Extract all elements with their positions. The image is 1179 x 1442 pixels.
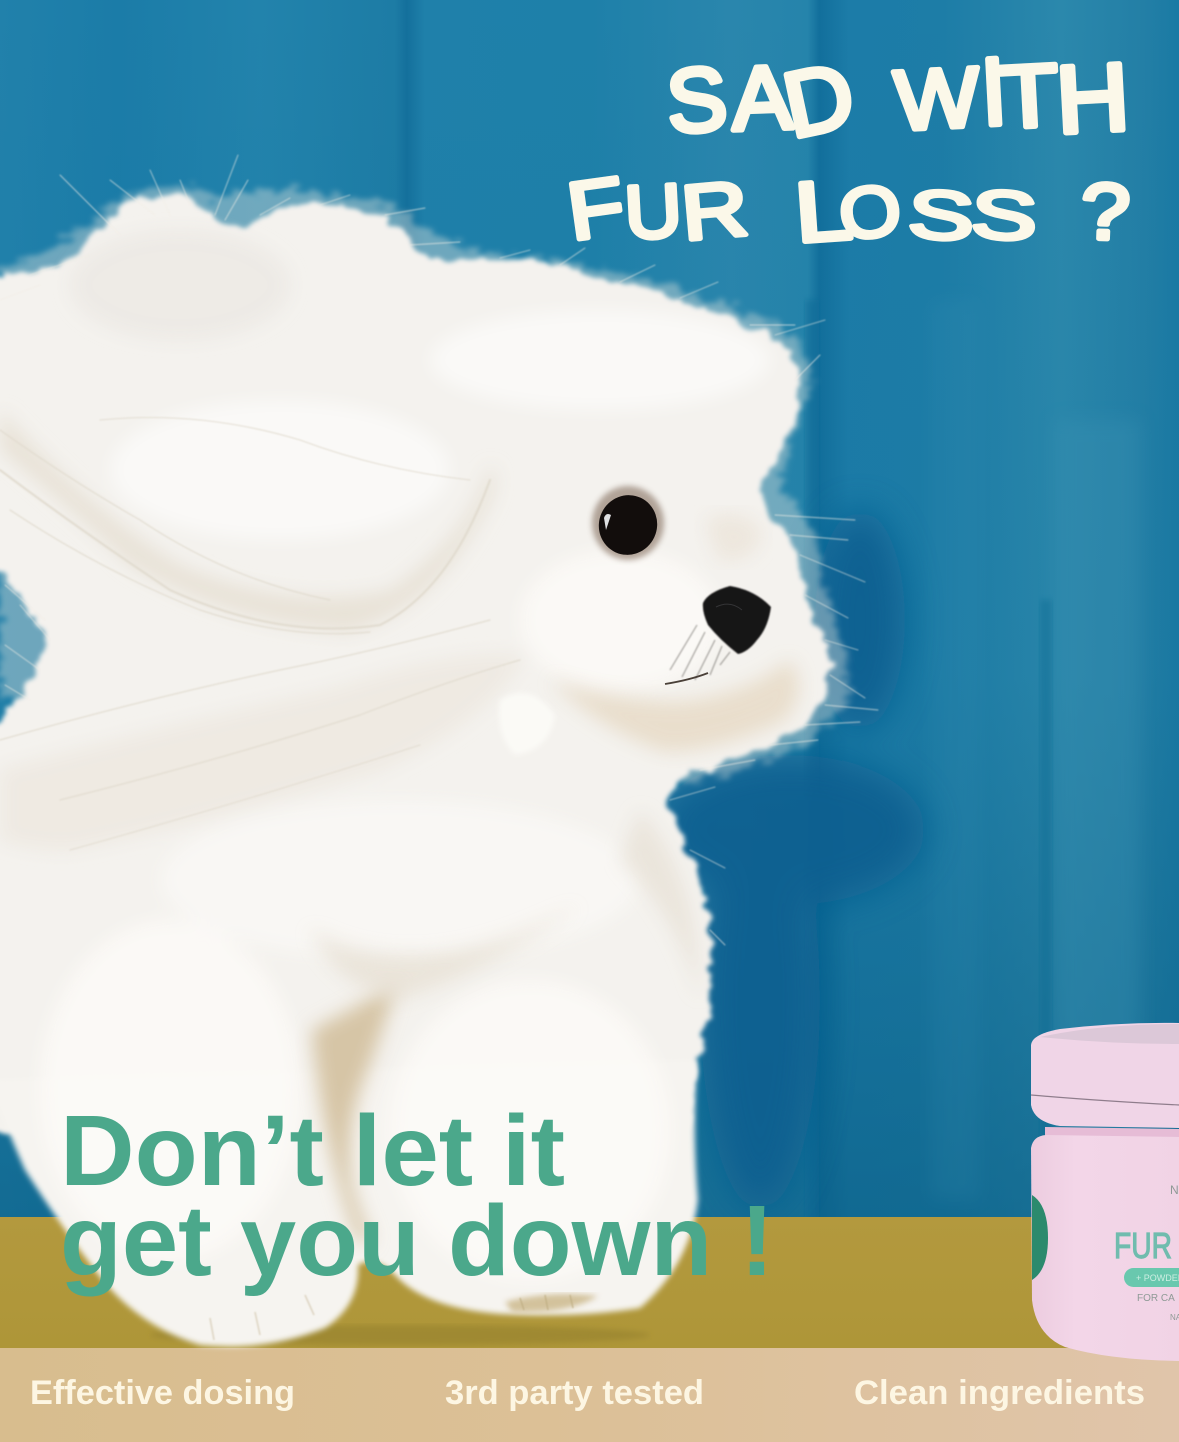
benefit labels: 3rd party tested xyxy=(445,1374,704,1412)
title: sad with fur loss: F xyxy=(562,161,630,258)
jar neck xyxy=(1045,1127,1179,1140)
muzzle whiskers xyxy=(670,625,730,680)
title: sad with fur loss: W xyxy=(892,49,982,148)
jar label: pill xyxy=(1124,1268,1179,1287)
front paws xyxy=(210,1294,598,1340)
title: sad with fur loss: H xyxy=(1053,43,1132,153)
benefit labels xyxy=(30,1374,1145,1412)
title: sad with fur loss: T xyxy=(997,45,1061,147)
title: sad with fur loss: A xyxy=(730,48,794,150)
title: sad with fur loss: D xyxy=(775,43,863,157)
title: sad with fur loss: S xyxy=(663,49,730,153)
title: sad with fur loss: I xyxy=(978,37,1009,146)
shadow between the legs xyxy=(312,985,396,1242)
title: sad with fur loss: R xyxy=(678,164,751,256)
long fur streaks xyxy=(0,418,520,850)
benefit labels: Effective dosing xyxy=(30,1374,295,1412)
title: sad with fur loss: U xyxy=(622,169,684,256)
dog shadow on table xyxy=(150,1325,650,1345)
green headline: get you down ! xyxy=(60,1185,774,1297)
title: sad with fur loss xyxy=(562,37,1132,260)
dog xyxy=(0,155,878,1347)
table top xyxy=(0,1217,1179,1349)
dog nose xyxy=(665,586,771,684)
jar side badge xyxy=(1032,1195,1048,1280)
jar label: small print: N xyxy=(1170,1183,1179,1197)
title: sad with fur loss: O xyxy=(835,169,905,256)
benefit labels: Clean ingredients xyxy=(854,1374,1145,1412)
jar body xyxy=(1031,1135,1179,1361)
title: sad with fur loss: S xyxy=(906,176,976,256)
dog cast shadow on curtain xyxy=(655,510,925,1210)
beige bottom band xyxy=(0,1348,1179,1442)
translucent fur halo xyxy=(0,186,850,785)
dog legs and paws silhouette xyxy=(0,1060,698,1347)
cream under-chin xyxy=(550,660,799,752)
title: sad with fur loss: S xyxy=(969,176,1039,256)
fur shading: ear and wind-swept mane xyxy=(0,230,770,1280)
jar label: small print: FOR CA xyxy=(1137,1293,1175,1304)
title: sad with fur loss: ? xyxy=(1079,166,1132,257)
chest tuft xyxy=(499,693,555,755)
product jar xyxy=(1031,1023,1179,1361)
green headline: Don’t let it xyxy=(60,1095,565,1207)
jar label: small print xyxy=(1137,1183,1179,1322)
title: sad with fur loss: L xyxy=(792,162,855,260)
dog upper body silhouette xyxy=(0,195,831,1130)
dog eye xyxy=(589,486,667,564)
flyaway hair wisps xyxy=(0,155,878,945)
green headline xyxy=(60,1095,774,1297)
jar lid xyxy=(1031,1023,1179,1128)
